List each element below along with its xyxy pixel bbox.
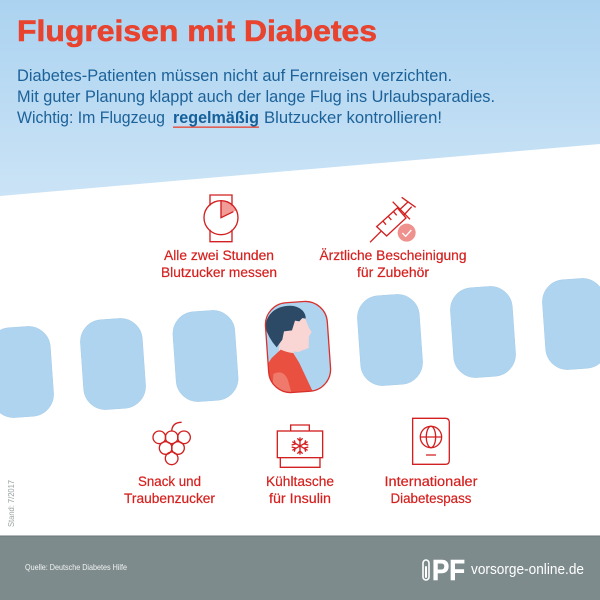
date stamp: Stand: 7/2017 (7, 479, 16, 527)
label: grapes: Traubenzucker (124, 491, 216, 506)
logo: IPF: PF (432, 555, 465, 587)
icon: grapes (153, 422, 190, 465)
intro text: regelmäßig (173, 108, 259, 127)
label: passport: Internationaler (384, 474, 478, 489)
source note: Quelle: Deutsche Diabetes Hilfe (25, 562, 127, 572)
icon: passport (413, 418, 449, 464)
label: cooler bag: für Insulin (269, 491, 331, 506)
intro text: Blutzucker kontrollieren! (264, 108, 442, 127)
intro text (17, 66, 495, 128)
icon: watch (204, 195, 238, 242)
label: grapes (124, 474, 216, 506)
intro text: Wichtig: Im Flugzeug (17, 108, 165, 127)
label: watch (161, 248, 277, 280)
footer bar (0, 536, 600, 600)
label: passport: Diabetespass (390, 491, 472, 506)
label: watch: Alle zwei Stunden (164, 248, 274, 263)
label: passport (384, 474, 478, 506)
label: grapes: Snack und (138, 474, 201, 489)
website: vorsorge-online.de (471, 562, 584, 578)
label: cooler bag: Kühltasche (266, 474, 334, 489)
window with passenger (264, 300, 332, 396)
label: watch: Blutzucker messen (161, 265, 277, 280)
intro text: Mit guter Planung klappt auch der lange Flug ins Urlaubsparadies. (17, 87, 495, 106)
title: Flugreisen mit Diabetes (17, 15, 377, 48)
label: syringe: für Zubehör (357, 265, 430, 280)
airplane windows (0, 277, 600, 419)
intro text: Diabetes-Patienten müssen nicht auf Fernreisen verzichten. (17, 66, 452, 85)
icon: cooler bag (277, 425, 323, 467)
label: syringe (320, 248, 466, 280)
label: syringe: Ärztliche Bescheinigung (320, 248, 466, 263)
icon: syringe (370, 197, 416, 242)
sky background (0, 0, 600, 196)
label: cooler bag (266, 474, 334, 506)
